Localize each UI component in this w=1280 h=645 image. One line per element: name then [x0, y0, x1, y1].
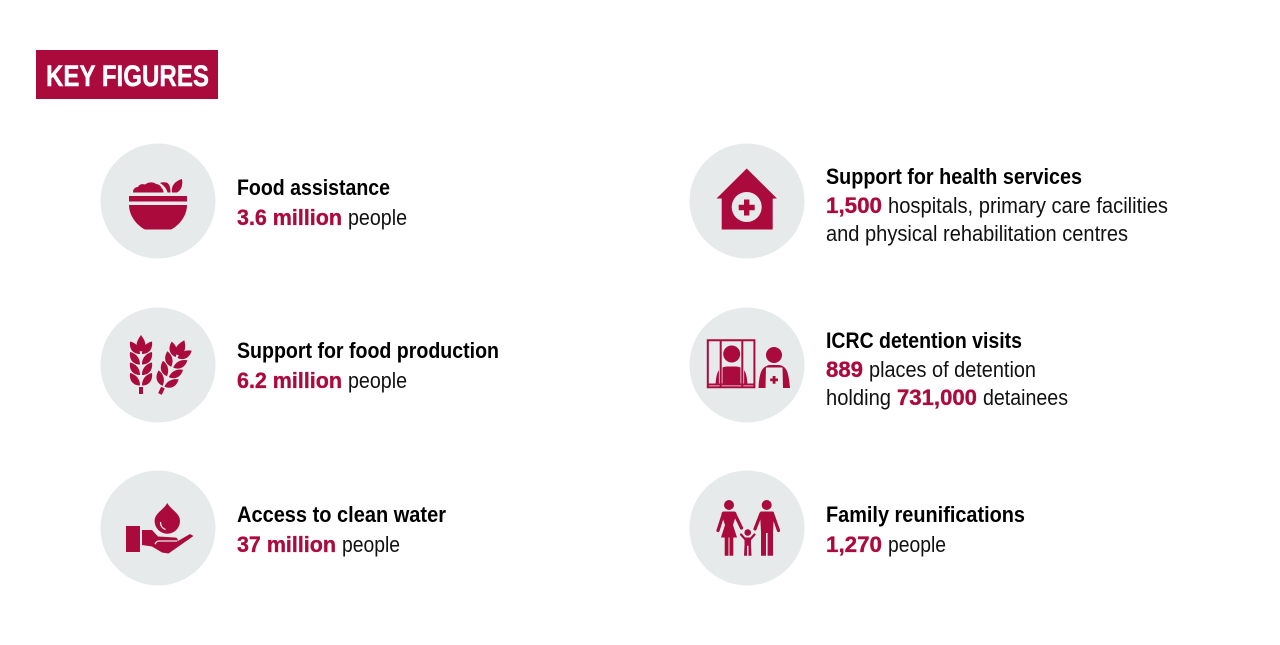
- text: access to clean water: Access to clean water: [237, 502, 446, 527]
- text: ICRC detention visits: places of detention: [869, 357, 1036, 382]
- title: key figures: KEY FIGURES: [46, 60, 209, 93]
- text: ICRC detention visits: 731,000: [897, 385, 977, 410]
- panel: family reunifications: [690, 470, 1025, 586]
- text: access to clean water: [237, 502, 446, 557]
- icon: wheat ears: [130, 335, 195, 399]
- text: ICRC detention visits: detainees: [983, 385, 1068, 410]
- text: support for food production: Support for food production: [237, 338, 499, 363]
- panel: food assistance: [100, 144, 407, 258]
- text: food assistance: [237, 175, 407, 230]
- text: family reunifications: 1,270: [826, 532, 882, 557]
- text: support for food production: 6.2 million: [237, 368, 342, 393]
- text: support for health services: and physical rehabilitation centres: [826, 221, 1128, 246]
- icon: health post house: [716, 168, 777, 230]
- text: family reunifications: people: [888, 532, 946, 557]
- text: support for health services: [826, 164, 1168, 246]
- icon: salad bowl: [129, 179, 187, 230]
- text: food assistance: 3.6 million: [237, 205, 342, 230]
- icon: hand holding water drop: [126, 503, 194, 554]
- text: ICRC detention visits: 889: [826, 357, 863, 382]
- text: access to clean water: people: [342, 532, 400, 557]
- text: support for health services: 1,500: [826, 193, 882, 218]
- text: support for health services: hospitals, primary care facilities: [888, 193, 1168, 218]
- text: food assistance: Food assistance: [237, 175, 390, 200]
- text: food assistance: people: [348, 205, 407, 230]
- panel: support for food production: [100, 308, 499, 422]
- panel: ICRC detention visits: [690, 308, 1068, 422]
- text: ICRC detention visits: holding: [826, 385, 891, 410]
- text: support for health services: Support for health services: [826, 164, 1082, 189]
- text: family reunifications: [826, 502, 1025, 557]
- text: ICRC detention visits: ICRC detention visits: [826, 328, 1022, 353]
- icon: family holding hands: [718, 500, 778, 556]
- title: key figures: [36, 50, 218, 99]
- text: ICRC detention visits: [826, 328, 1068, 410]
- panel: access to clean water: [100, 470, 446, 586]
- text: access to clean water: 37 million: [237, 532, 336, 557]
- text: support for food production: people: [348, 368, 407, 393]
- panel: support for health services: [690, 144, 1168, 258]
- icon: detainee behind bars and delegate: [708, 340, 790, 388]
- text: family reunifications: Family reunifications: [826, 502, 1025, 527]
- text: support for food production: [237, 338, 499, 393]
